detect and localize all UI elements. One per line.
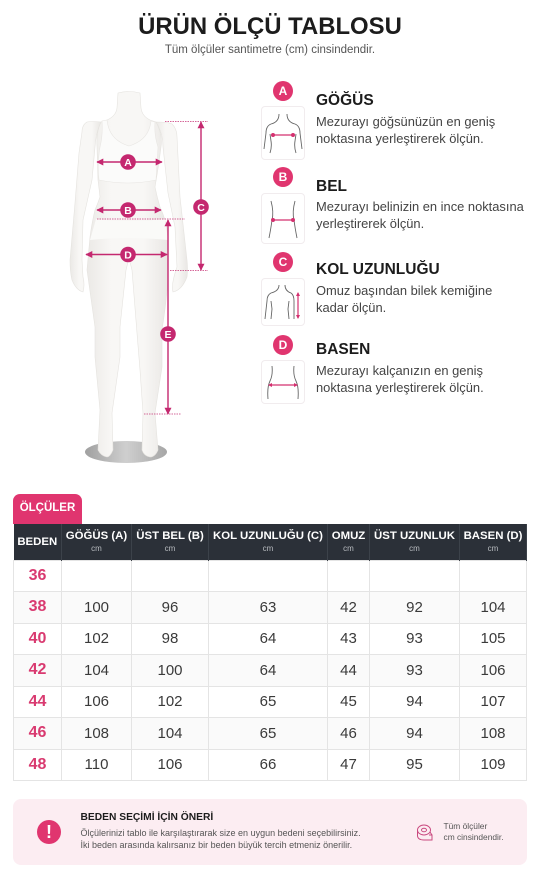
- heading: göğüs: GÖĞÜS: [316, 92, 374, 109]
- size table: OMUZ: [332, 530, 365, 542]
- size table: 47: [340, 756, 357, 773]
- size table: cm: [343, 544, 354, 552]
- size table: cm: [263, 544, 273, 552]
- badge B: [273, 167, 293, 187]
- size table: cm: [91, 544, 102, 552]
- arrow E: [160, 220, 176, 414]
- size table: 44: [340, 662, 357, 679]
- text: basen: noktasına yerleştirerek ölçün.: [316, 380, 484, 395]
- heading: bel: BEL: [316, 178, 347, 195]
- title: ÜRÜN ÖLÇÜ TABLOSU: [138, 13, 402, 40]
- size table: 94: [406, 693, 423, 710]
- size table: 42: [29, 661, 46, 678]
- arrow B: B: [124, 205, 132, 217]
- size table: ÜST UZUNLUK: [374, 530, 455, 542]
- size table: BEDEN: [17, 536, 57, 548]
- mannequin base: [85, 441, 167, 463]
- size table: KOL UZUNLUĞU (C): [213, 530, 323, 542]
- badge D: [273, 335, 293, 355]
- size table: 44: [29, 693, 46, 710]
- size table: cm: [165, 544, 175, 552]
- size table: 104: [480, 599, 506, 616]
- size table: 109: [480, 756, 506, 773]
- size table: 43: [340, 630, 357, 647]
- arrow D: D: [124, 250, 132, 262]
- callout: size advice: [13, 799, 527, 865]
- size table: 66: [260, 756, 276, 773]
- size table: 108: [480, 725, 506, 742]
- size table: 104: [84, 662, 109, 679]
- size table: ÜST BEL (B): [136, 530, 204, 542]
- badge A: [273, 81, 293, 101]
- size table: 110: [85, 756, 108, 773]
- size table: 100: [157, 662, 183, 679]
- icon: exclamation: !: [46, 822, 52, 842]
- mannequin body: [70, 92, 188, 457]
- size table: 102: [84, 630, 109, 647]
- size table: 40: [29, 630, 46, 647]
- size table: 65: [260, 693, 276, 710]
- size table: 42: [340, 599, 357, 616]
- size table: 95: [406, 756, 423, 773]
- size table: 64: [260, 630, 276, 647]
- size table: 105: [480, 630, 506, 647]
- icon: chest measurement: [261, 106, 305, 160]
- arrow E: E: [164, 329, 172, 341]
- text: kol uzunluğu: Omuz başından bilek kemiğine: [316, 283, 492, 298]
- size table: 93: [406, 630, 423, 647]
- text: kol uzunluğu: kadar ölçün.: [316, 300, 386, 315]
- size table: 104: [157, 725, 183, 742]
- callout heading: BEDEN SEÇİMİ İÇİN ÖNERİ: [80, 812, 213, 822]
- heading: kol uzunluğu: KOL UZUNLUĞU: [316, 261, 440, 278]
- size table: GÖĞÜS (A): [66, 530, 127, 542]
- arrow A: [97, 154, 162, 170]
- text: göğüs: noktasına yerleştirerek ölçün.: [316, 131, 484, 146]
- callout text: Ölçülerinizi tablo ile karşılaştırarak size en uygun bedeni seçebilirsiniz.: [80, 828, 361, 838]
- size table: 48: [29, 756, 46, 773]
- size table: cm: [488, 544, 498, 552]
- icon: measuring tape: [417, 824, 432, 840]
- size table: 98: [162, 630, 178, 647]
- size table: 46: [29, 724, 46, 741]
- size table: 65: [260, 725, 276, 742]
- subtitle: Tüm ölçüler santimetre (cm) cinsindendir.: [165, 44, 375, 56]
- text: basen: [316, 363, 484, 395]
- text: kol uzunluğu: [316, 283, 492, 315]
- size table: BASEN (D): [464, 530, 522, 542]
- arrow D: [86, 247, 167, 262]
- badge C: C: [279, 255, 287, 269]
- tab: ölçüler: ÖLÇÜLER: [20, 502, 75, 514]
- size table: 106: [480, 662, 506, 679]
- callout side note: cm cinsindendir.: [444, 832, 504, 842]
- size table: 92: [406, 599, 423, 616]
- size table: 107: [480, 693, 506, 710]
- arrow C: C: [197, 202, 205, 214]
- size table: 108: [84, 725, 109, 742]
- icon: hip measurement: [261, 360, 305, 404]
- text: bel: Mezurayı belinizin en ince noktasına: [316, 199, 524, 214]
- size table: 94: [406, 725, 423, 742]
- size table: 64: [260, 662, 276, 679]
- text: bel: yerleştirerek ölçün.: [316, 216, 424, 231]
- badge B: B: [279, 170, 287, 184]
- text: basen: Mezurayı kalçanızın en geniş: [316, 363, 483, 378]
- callout side note: Tüm ölçüler: [444, 820, 487, 830]
- callout text: [80, 828, 361, 850]
- icon: arm length measurement: [261, 278, 305, 326]
- size table: 93: [406, 662, 423, 679]
- size table: 46: [340, 725, 357, 742]
- text: göğüs: [316, 114, 495, 146]
- icon: exclamation: [37, 820, 61, 844]
- badge A: A: [279, 84, 287, 98]
- size table: 38: [29, 598, 46, 615]
- mannequin figure with measurement arrows: [70, 91, 209, 463]
- size table: 36: [29, 567, 46, 584]
- text: bel: [316, 199, 524, 231]
- size table: 100: [84, 599, 109, 616]
- arrow C: [193, 122, 209, 270]
- text: göğüs: Mezurayı göğsünüzün en geniş: [316, 114, 495, 129]
- size table: 45: [340, 693, 357, 710]
- arrow A: A: [124, 157, 132, 169]
- icon: waist measurement: [261, 193, 305, 244]
- dotted guide lines: [97, 122, 208, 414]
- size table: 106: [157, 756, 183, 773]
- badge C: [273, 252, 293, 272]
- size table: [13, 524, 527, 781]
- callout text: İki beden arasında kalırsanız bir beden büyük tercih etmeniz önerilir.: [80, 840, 352, 850]
- heading: basen: BASEN: [316, 341, 370, 358]
- badge D: D: [279, 338, 287, 352]
- size table: 102: [157, 693, 183, 710]
- size table: 63: [260, 599, 276, 616]
- size table: cm: [409, 544, 420, 552]
- size table: 106: [84, 693, 109, 710]
- callout side note: [444, 820, 504, 842]
- arrow B: [97, 202, 161, 218]
- size table: 96: [162, 599, 178, 616]
- tab: ölçüler: [13, 494, 82, 524]
